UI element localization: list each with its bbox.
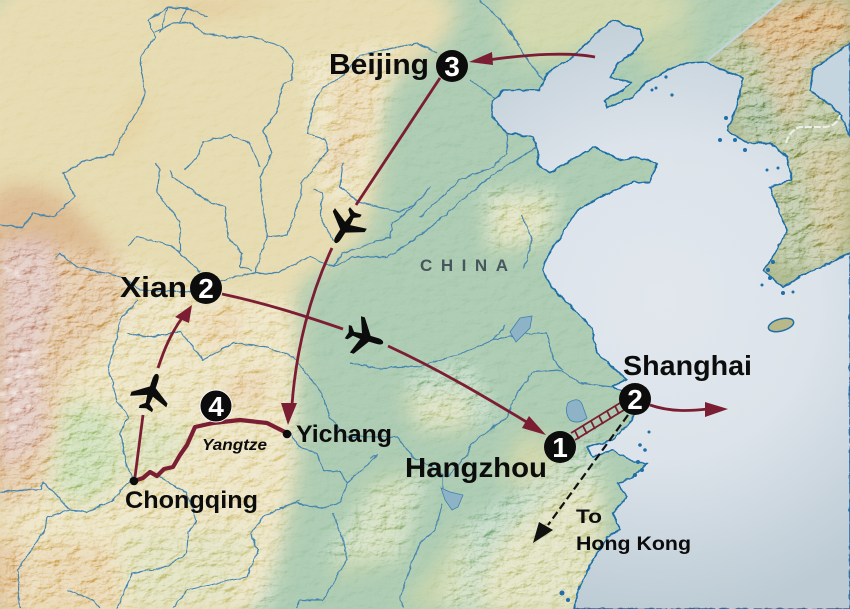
label: Hangzhou: Hangzhou bbox=[405, 452, 547, 483]
marker: Yichang bbox=[283, 430, 291, 438]
China-Korea border bbox=[708, 0, 782, 60]
Korea and Manchuria relief colour bbox=[709, 0, 850, 286]
label: Shanghai: Shanghai bbox=[623, 350, 752, 381]
icon: plane Beijing to Yichang bbox=[319, 201, 372, 253]
lake: Poyang bbox=[441, 488, 463, 510]
rivers bbox=[0, 0, 612, 608]
badge: Beijing 3 nights: 3 bbox=[444, 51, 460, 82]
lake: Taihu bbox=[566, 400, 587, 422]
lakes bbox=[441, 316, 587, 510]
badge: Shanghai 2 nights: 2 bbox=[627, 384, 643, 415]
icon: plane Xian to Hangzhou bbox=[341, 314, 389, 361]
label: To Hong Kong: To bbox=[576, 507, 602, 528]
label: To Hong Kong bbox=[576, 507, 691, 555]
snow speckles on western peaks bbox=[0, 268, 45, 432]
lake: Hongze bbox=[510, 316, 532, 342]
badge: Xian 2 nights bbox=[190, 272, 222, 304]
badge: Yangtze 4 nights bbox=[200, 390, 232, 422]
route: Chongqing to Xian flight bbox=[135, 305, 192, 477]
badge: Beijing 3 nights bbox=[436, 50, 468, 82]
route: departure from Shanghai bbox=[650, 402, 728, 417]
route: Beijing to Yichang flight bbox=[281, 78, 440, 425]
label: China: CHINA bbox=[420, 256, 508, 275]
label: Yangtze river: Yangtze bbox=[202, 437, 267, 454]
label: Beijing: Beijing bbox=[329, 49, 429, 81]
label: Yichang: Yichang bbox=[296, 421, 392, 448]
badge: Hangzhou 1 night: 1 bbox=[552, 432, 568, 463]
East Sea bbox=[810, 43, 850, 137]
Korean DMZ border bbox=[786, 115, 840, 143]
icon: plane Chongqing to Xian bbox=[127, 368, 175, 416]
label: To Hong Kong: Hong Kong bbox=[576, 534, 691, 555]
Jeju island bbox=[767, 316, 795, 334]
badge: Xian 2 nights: 2 bbox=[198, 273, 214, 304]
route: Xian to Hangzhou flight bbox=[222, 294, 546, 435]
marker: Chongqing bbox=[130, 477, 138, 485]
label: Xian: Xian bbox=[120, 272, 187, 304]
coastal islands bbox=[560, 75, 794, 602]
route: Yangtze cruise bbox=[134, 420, 287, 481]
badge: Shanghai 2 nights bbox=[619, 383, 651, 415]
route: arrival into Beijing bbox=[469, 52, 595, 65]
badge: Yangtze 4 nights: 4 bbox=[208, 391, 224, 422]
badge: Hangzhou 1 night bbox=[544, 431, 576, 463]
sea bbox=[492, 20, 850, 609]
rail: Hangzhou to Shanghai bbox=[571, 403, 624, 440]
label: Chongqing: Chongqing bbox=[125, 487, 258, 514]
route: dashed line to Hong Kong bbox=[533, 415, 628, 543]
